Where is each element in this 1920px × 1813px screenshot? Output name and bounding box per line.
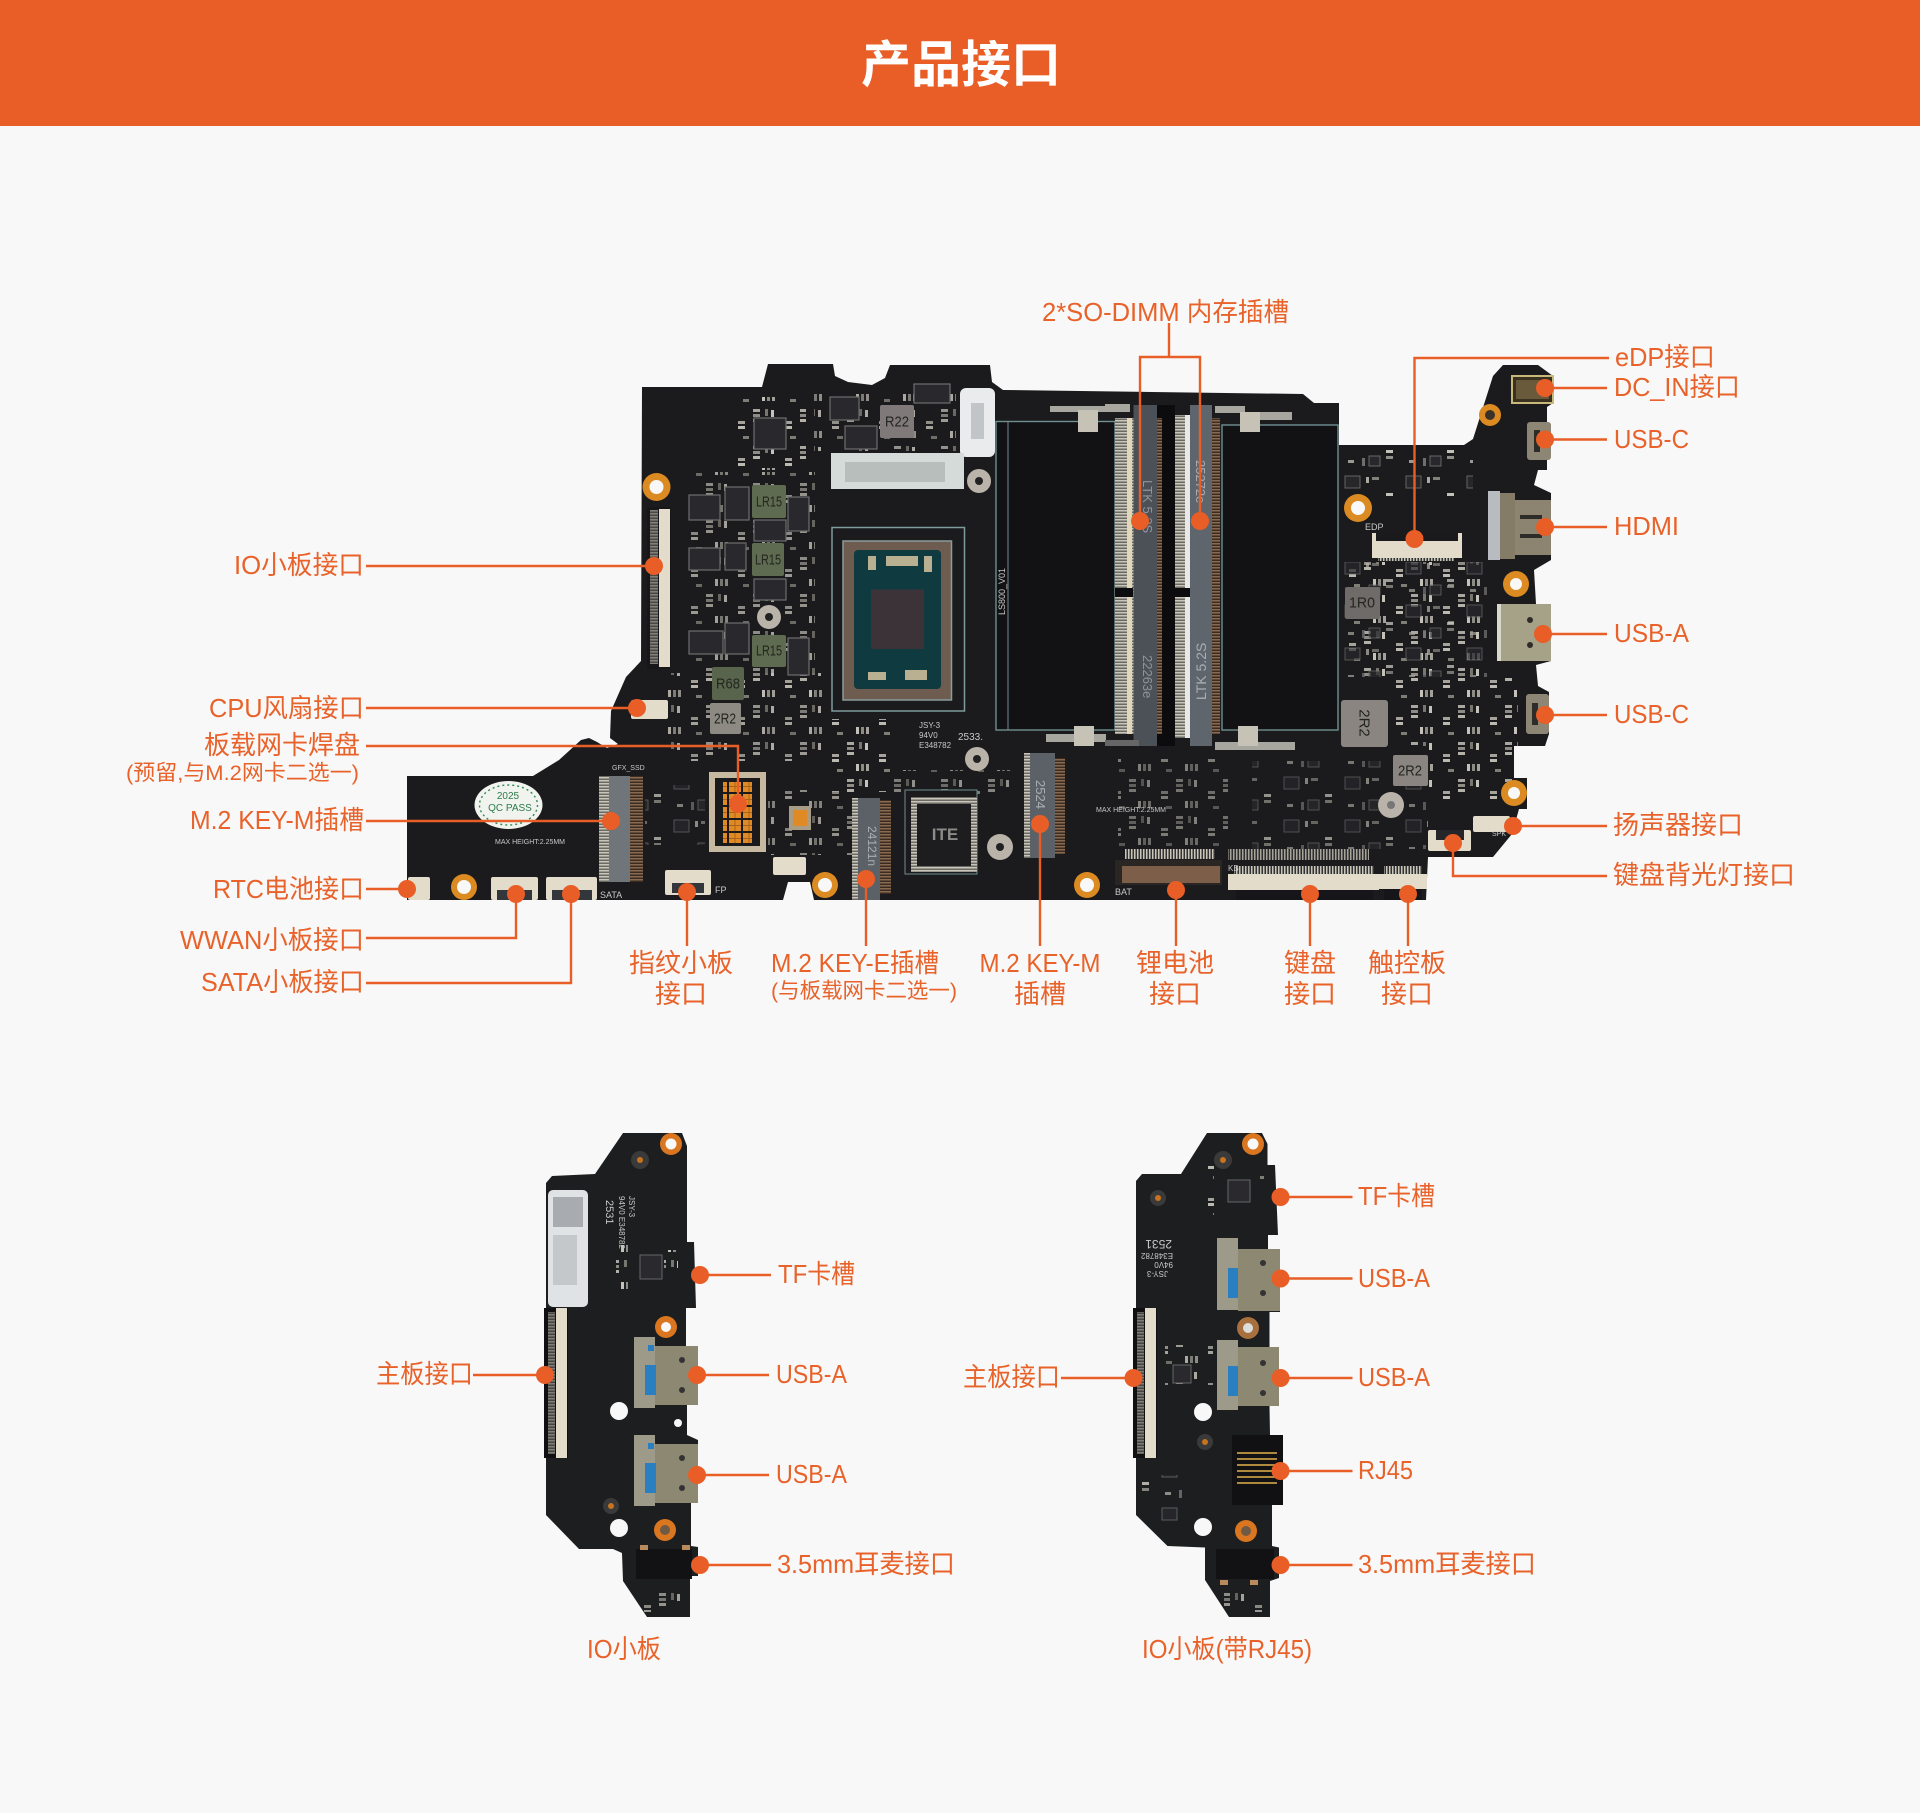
connector: touchpad — [1378, 866, 1427, 900]
inductors: R22 — [885, 414, 909, 430]
callout: eDP接口: eDP接口 — [1615, 342, 1715, 372]
board outline — [1136, 1133, 1283, 1617]
inductors: R68 — [716, 676, 740, 692]
silk labels: LS800_V01 — [997, 568, 1007, 615]
callout: USB-A 2: USB-A — [776, 1459, 848, 1489]
mounting holes — [451, 404, 1529, 900]
callout: USB-A 2: USB-A — [1358, 1362, 1431, 1392]
QC sticker: 2025 — [497, 791, 520, 802]
memory clips — [1046, 404, 1295, 750]
callout: 3.5mm耳麦接口: 3.5mm耳麦接口 — [1358, 1549, 1536, 1579]
callout: 板载网卡焊盘: 板载网卡焊盘 — [204, 730, 360, 760]
connector: CPU fan — [631, 700, 668, 719]
silk labels: SPK — [1492, 831, 1506, 838]
callout: TF卡槽 — [691, 1259, 855, 1289]
callout: 触控板接口: 接口 — [1381, 979, 1433, 1009]
SO-DIMM slots: LTK 5.2S — [1193, 643, 1209, 700]
callout: WWAN小板接口: WWAN小板接口 — [180, 925, 364, 955]
silk text: 94V0 E348782 — [617, 1196, 626, 1249]
RJ45 port — [1232, 1435, 1283, 1505]
callout: 锂电池接口: 锂电池 — [1136, 948, 1214, 978]
panel: main board photo — [407, 364, 1553, 900]
chip cluster lower — [640, 1588, 686, 1612]
callout: M.2 KEY-M插槽 left: M.2 KEY-M插槽 — [190, 805, 364, 835]
QC sticker — [474, 781, 542, 829]
QC sticker: QC PASS — [488, 803, 532, 814]
mounting hole — [660, 1133, 682, 1155]
silk text — [603, 1196, 636, 1249]
USB-A port 1 — [1217, 1238, 1280, 1311]
callout: USB-C upper: USB-C — [1614, 424, 1689, 454]
callout: SATA小板接口: SATA小板接口 — [201, 967, 364, 997]
SO-DIMM slots: 25272e — [1193, 460, 1208, 503]
callout: 触控板接口: 触控板 — [1368, 948, 1446, 978]
USB-A port 2 — [634, 1435, 698, 1506]
port: USB-C lower — [1526, 694, 1549, 734]
callout: USB-C lower: USB-C — [1614, 699, 1689, 729]
callout: 扬声器接口 — [1504, 810, 1743, 840]
port: USB-A — [1497, 604, 1551, 661]
mounting hole — [1242, 1133, 1264, 1155]
memory bay left — [996, 422, 1115, 730]
M.2 slot: KEY-M centre — [1024, 753, 1065, 858]
callout: CPU风扇接口 — [209, 693, 646, 723]
silk text: 2531 — [603, 1200, 615, 1224]
inductors: 2R2 — [1356, 709, 1372, 737]
port: DC jack — [1512, 376, 1553, 403]
silk labels: KB — [1228, 864, 1239, 873]
callout: 指纹小板接口 — [629, 883, 733, 1009]
inductors: LR15 — [756, 494, 782, 510]
silk text: JSY-3 — [1146, 1269, 1168, 1278]
callout: RJ45: RJ45 — [1358, 1455, 1413, 1485]
callout: M.2 KEY-E插槽: M.2 KEY-E插槽 — [771, 948, 939, 978]
silk text: 2531 — [1145, 1237, 1172, 1251]
silk text — [1140, 1237, 1173, 1278]
silk labels: E348782 — [919, 741, 952, 750]
memory bay right — [1222, 425, 1338, 730]
callout: 3.5mm耳麦接口 — [691, 1549, 955, 1579]
callout: IO小板接口: IO小板接口 — [234, 550, 364, 580]
callout: 指纹小板接口: 指纹小板 — [629, 948, 733, 978]
silk labels: 94V0 — [919, 731, 938, 740]
callout: 键盘接口 — [1284, 885, 1336, 1009]
test points — [1150, 1151, 1232, 1206]
chip cluster — [616, 1243, 678, 1291]
header banner — [0, 0, 1920, 126]
callout: WWAN小板接口 — [180, 885, 525, 955]
caption: IO小板: IO小板 — [587, 1634, 661, 1664]
M.2 slot: KEY-E: 24121n — [865, 826, 879, 866]
callout: M.2 KEY-M 插槽 bottom — [980, 815, 1100, 1009]
callout: USB-C lower — [1536, 699, 1689, 729]
callout: DC_IN接口 — [1536, 372, 1740, 402]
callout: eDP接口 — [1406, 342, 1715, 548]
silk labels: JSY-3 — [919, 721, 941, 730]
silk text: JSY-3 — [627, 1196, 636, 1218]
connector: keyboard — [1228, 849, 1379, 900]
callout: CPU风扇接口: CPU风扇接口 — [209, 693, 364, 723]
callout: 键盘背光灯接口: 键盘背光灯接口 — [1613, 860, 1795, 890]
callout: USB-A 2 — [1272, 1362, 1431, 1392]
callout: 主板接口 — [963, 1362, 1142, 1392]
silk labels — [495, 522, 1506, 900]
callout: USB-A 1: USB-A — [1358, 1263, 1431, 1293]
silk labels: GFX_SSD — [612, 765, 645, 772]
inductors — [710, 405, 1428, 786]
callout: 键盘接口: 键盘 — [1284, 948, 1336, 978]
callout: 键盘背光灯接口 — [1444, 834, 1795, 890]
callout: RJ45 — [1272, 1455, 1413, 1485]
callout: 3.5mm耳麦接口: 3.5mm耳麦接口 — [777, 1549, 955, 1579]
callout: USB-A — [1534, 618, 1690, 648]
M.2 slot: left KEY-M — [599, 776, 643, 882]
callout: USB-A 1 — [688, 1359, 848, 1389]
inductors: LR15 — [755, 552, 781, 568]
SO-DIMM slots: LTK 5.2S — [1140, 480, 1155, 534]
silk text: 94V0 — [1154, 1260, 1173, 1269]
silk text: E348782 — [1140, 1251, 1173, 1260]
SO-DIMM slots — [1115, 405, 1220, 746]
USB-A port 2 — [1217, 1340, 1279, 1410]
callout: TF卡槽: TF卡槽 — [1358, 1181, 1435, 1211]
test point — [631, 1151, 649, 1169]
chip cluster near connector — [1165, 1345, 1213, 1385]
callout: TF卡槽 — [1272, 1181, 1435, 1211]
callout: HDMI — [1536, 511, 1679, 541]
connector: IO board FPC — [647, 507, 671, 669]
chip cluster — [1202, 1165, 1264, 1215]
callout: 主板接口: 主板接口 — [963, 1362, 1060, 1392]
ITE controller: ITE — [932, 825, 958, 844]
holes — [1194, 1317, 1259, 1542]
callout: M.2 KEY-E插槽: (与板载网卡二选一) — [771, 979, 957, 1003]
callout: 2*SO-DIMM 内存插槽: 2*SO-DIMM 内存插槽 — [1042, 297, 1289, 327]
audio jack — [1216, 1549, 1274, 1585]
connectors: WWAN, SATA, fingerprint, debug, RTC — [408, 857, 806, 900]
audio jack — [636, 1545, 692, 1579]
silk labels: 2533. — [958, 732, 983, 743]
callout: 3.5mm耳麦接口 — [1272, 1549, 1536, 1579]
connector: battery — [1115, 849, 1222, 885]
board outline — [546, 1133, 698, 1617]
sticker: serial tag — [960, 388, 995, 457]
inductors: 1R0 — [1349, 594, 1375, 612]
callout: USB-A: USB-A — [1614, 618, 1690, 648]
callout: 2*SO-DIMM 内存插槽 — [1042, 297, 1289, 530]
callout: 主板接口 — [376, 1359, 554, 1389]
callout: 锂电池接口: 接口 — [1149, 979, 1201, 1009]
inductors: LR15 — [756, 642, 782, 660]
silk labels: BAT — [1115, 887, 1132, 897]
FPC connector — [1133, 1308, 1157, 1458]
callout: M.2 KEY-M 插槽 bottom: M.2 KEY-M — [980, 948, 1100, 978]
callout: M.2 KEY-M插槽 left — [190, 805, 620, 835]
title: 产品接口 — [861, 37, 1061, 93]
callout: USB-C upper — [1536, 424, 1689, 454]
chip cluster bottom — [1224, 1588, 1268, 1612]
connector: eDP — [1372, 533, 1462, 561]
caption: IO小板(带RJ45): IO小板(带RJ45) — [1142, 1634, 1312, 1664]
callout: USB-A 2 — [688, 1459, 848, 1489]
USB-A port 1 — [634, 1337, 698, 1408]
M.2 slot: KEY-M centre: 2524 — [1033, 780, 1048, 809]
M.2 slot: KEY-E — [852, 798, 891, 900]
silk labels: MAX HEIGHT:2.25MM — [495, 839, 565, 846]
callout: M.2 KEY-M 插槽 bottom: 插槽 — [1014, 979, 1066, 1009]
callout: HDMI: HDMI — [1614, 511, 1679, 541]
sticker: long label — [831, 453, 964, 489]
small orange chip — [789, 806, 811, 830]
callout: DC_IN接口: DC_IN接口 — [1614, 372, 1740, 402]
Wi-Fi pad — [709, 772, 766, 852]
panel: IO board with RJ45 — [1133, 1133, 1283, 1617]
FPC connector — [544, 1308, 568, 1458]
component texture clusters — [645, 394, 1518, 855]
callout: SATA小板接口 — [201, 885, 580, 997]
SO-DIMM slots: 22263e — [1140, 655, 1155, 698]
callout: USB-A 1: USB-A — [776, 1359, 848, 1389]
board outline — [407, 364, 1553, 900]
callout: 主板接口: 主板接口 — [376, 1359, 473, 1389]
lower holes — [603, 1316, 682, 1541]
inductors: 2R2 — [1398, 762, 1422, 780]
callout: USB-A 1 — [1272, 1263, 1431, 1293]
power stage MOSFETs — [689, 384, 950, 675]
blurred label — [548, 1190, 588, 1307]
callout: TF卡槽: TF卡槽 — [778, 1259, 855, 1289]
silk labels: MAX HEIGHT:2.25MM — [1096, 807, 1166, 814]
panel: IO board — [544, 1133, 698, 1617]
connectors: speaker, keyboard light — [1428, 816, 1510, 851]
silk labels: EDP — [1365, 522, 1384, 532]
callout: RTC电池接口: RTC电池接口 — [213, 874, 364, 904]
callout: M.2 KEY-E插槽 — [771, 870, 957, 1003]
silk labels: SATA — [600, 890, 622, 900]
callout: 板载网卡焊盘: (预留,与M.2网卡二选一) — [126, 761, 359, 785]
callout: IO小板接口 — [234, 550, 663, 580]
port: HDMI — [1488, 491, 1551, 560]
callout: 板载网卡焊盘 — [126, 730, 747, 813]
callout: 触控板接口 — [1368, 885, 1446, 1009]
silk labels: FP — [715, 885, 727, 895]
callout: 键盘接口: 接口 — [1284, 979, 1336, 1009]
silver standoffs — [757, 469, 1404, 860]
CPU — [832, 528, 964, 711]
callout: 锂电池接口 — [1136, 881, 1214, 1009]
inductors: 2R2 — [714, 710, 736, 728]
callout: 扬声器接口: 扬声器接口 — [1613, 810, 1743, 840]
ITE controller — [905, 790, 977, 874]
port: USB-C upper — [1527, 422, 1551, 460]
callout: 指纹小板接口: 接口 — [655, 979, 707, 1009]
chip cluster lower left — [1138, 1475, 1182, 1525]
